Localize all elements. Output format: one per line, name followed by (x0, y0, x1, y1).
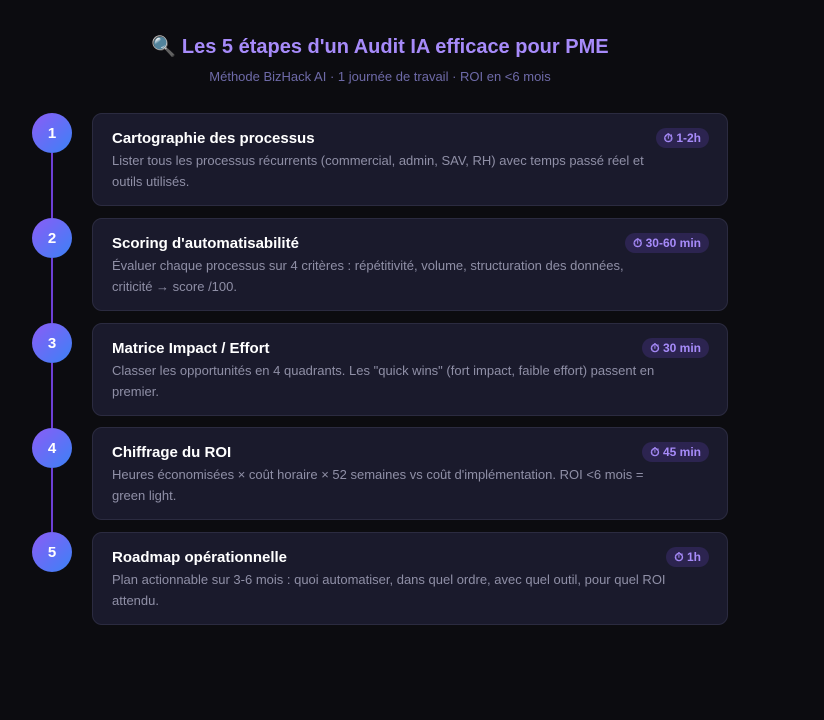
card: step 4: Heures économisées × coût horaire × 52 semaines vs coût d'implémentation. ROI <6 mois = (112, 467, 643, 482)
step 2 number: 2 (48, 230, 56, 247)
step 2 number (32, 218, 72, 258)
card: step 3: Classer les opportunités en 4 quadrants. Les "quick wins" (fort impact, faible effort) passent en (112, 363, 654, 378)
card: step 4: green light. (112, 488, 176, 503)
card: step 5: Roadmap opérationnelle (112, 549, 287, 566)
card: step 2 (92, 218, 728, 311)
step 5 number (32, 532, 72, 572)
subtitle: Méthode BizHack AI · 1 journée de travail · ROI en <6 mois (209, 69, 551, 84)
card: step 4: Chiffrage du ROI (112, 444, 231, 461)
card: step 5: attendu. (112, 593, 159, 608)
card: step 2: Évaluer chaque processus sur 4 critères : répétitivité, volume, structuration des données, (112, 258, 624, 273)
step 4 number: 4 (48, 440, 56, 457)
step 3 number: 3 (48, 335, 56, 352)
card: step 3: Matrice Impact / Effort (112, 340, 270, 357)
card: step 2: Scoring d'automatisabilité (112, 235, 299, 252)
step 4 number (32, 428, 72, 468)
card: step 1: Cartographie des processus (112, 130, 315, 147)
card: step 3: premier. (112, 384, 159, 399)
card: step 3: ⏱ 30 min (650, 341, 701, 355)
card: step 3 (92, 323, 728, 416)
step 1 number: 1 (48, 125, 56, 142)
card: step 5 (92, 532, 728, 625)
title: 🔍 Les 5 étapes d'un Audit IA efficace pour PME (151, 36, 609, 58)
card: step 1 (92, 113, 728, 206)
step 3 number (32, 323, 72, 363)
card: step 1: outils utilisés. (112, 174, 189, 189)
card: step 4: ⏱ 45 min (650, 445, 701, 459)
card: step 1: ⏱ 1-2h (664, 131, 701, 145)
step 5 number: 5 (48, 544, 56, 561)
card: step 4 (92, 427, 728, 520)
card: step 2: criticité → score /100. (112, 279, 237, 294)
card: step 5: Plan actionnable sur 3-6 mois : quoi automatiser, dans quel ordre, avec quel outil, pour quel ROI (112, 572, 666, 587)
card: step 5: ⏱ 1h (674, 550, 701, 564)
card: step 1: Lister tous les processus récurrents (commercial, admin, SAV, RH) avec temps passé réel et (112, 153, 644, 168)
card: step 2: ⏱ 30-60 min (633, 236, 701, 250)
step 1 number (32, 113, 72, 153)
